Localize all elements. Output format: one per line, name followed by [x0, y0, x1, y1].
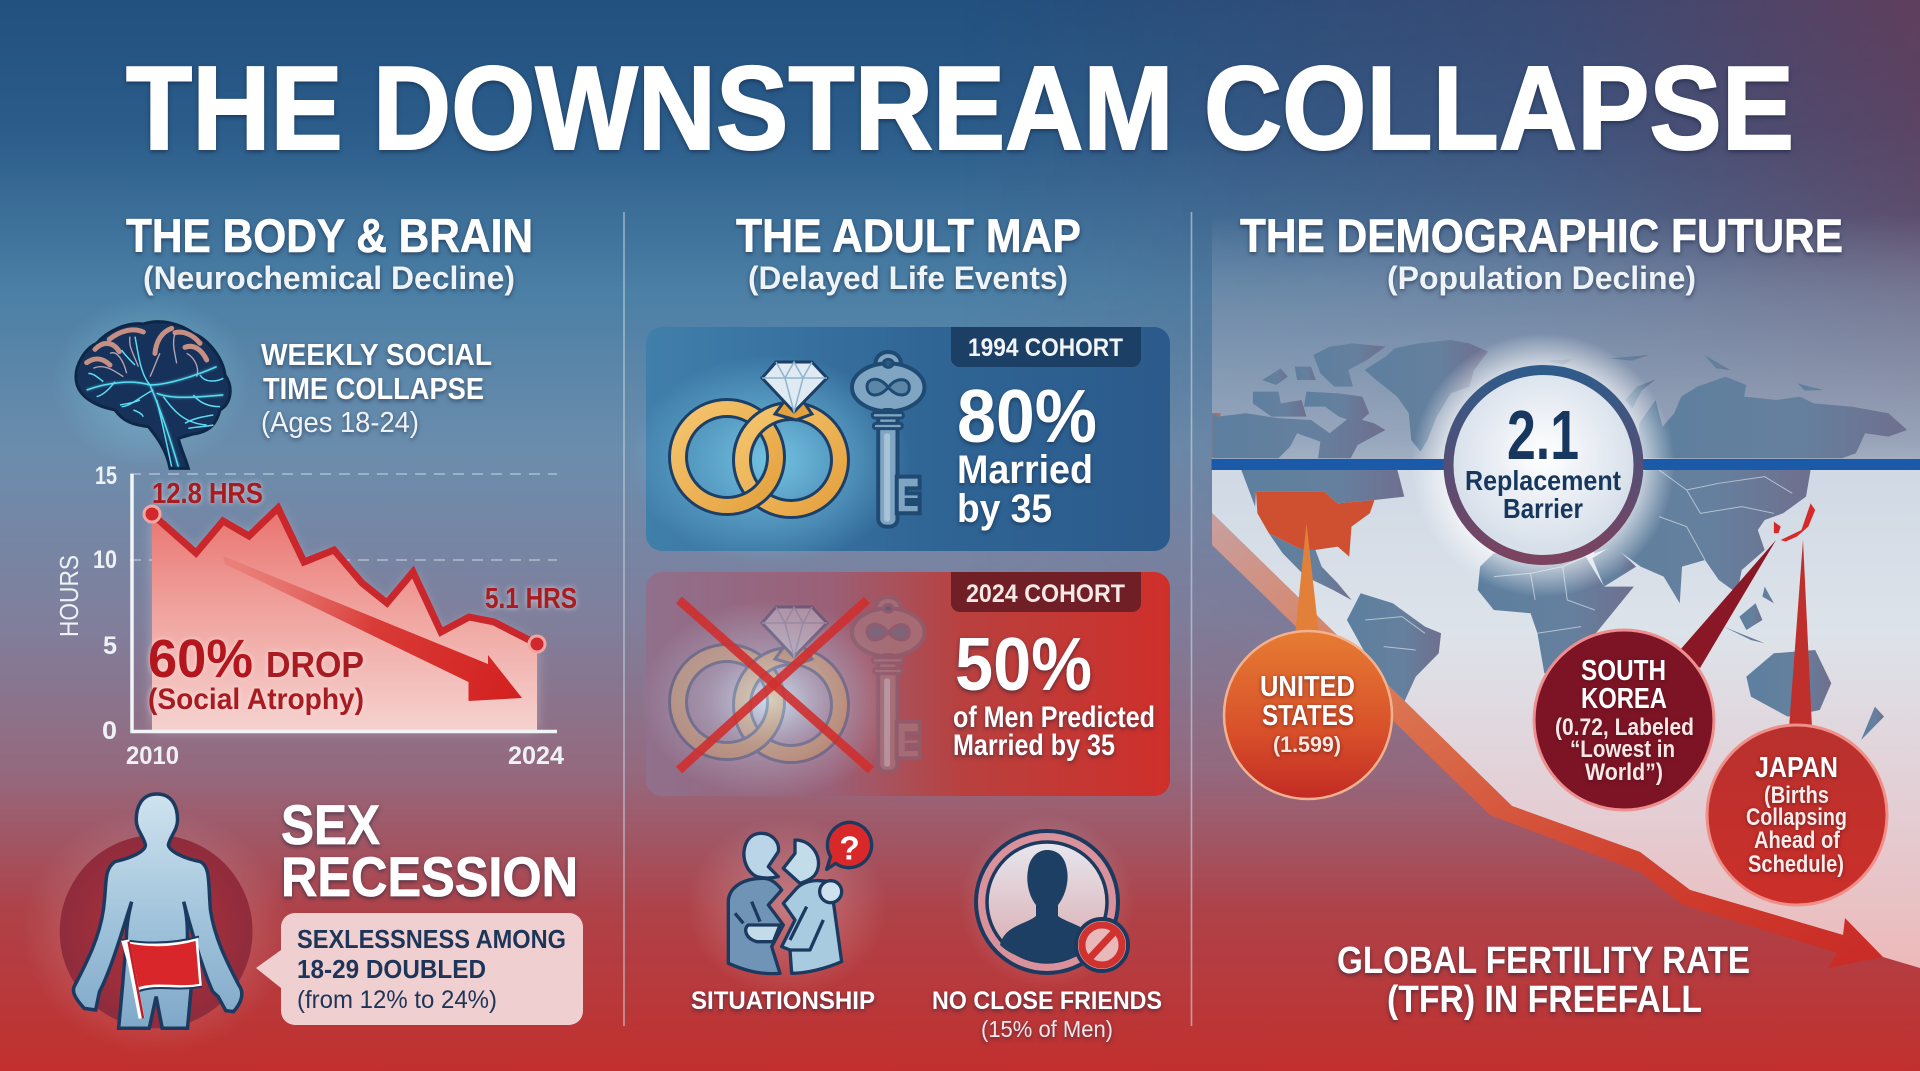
panel: 2024 cohort	[640, 572, 1170, 800]
text: global fertility rate in freefall	[1337, 940, 1750, 1021]
cohort tag 1994: 1994 COHORT	[968, 334, 1123, 362]
stat: 80 percent married by 35: Married	[957, 448, 1093, 492]
stat: 80 percent married by 35: 80%	[957, 374, 1097, 458]
icon: question speech bubble	[827, 822, 872, 869]
icon: glowing brain	[52, 295, 252, 468]
heading: the adult map: (Delayed Life Events)	[748, 260, 1068, 296]
bubble: south korea: KOREA	[1581, 683, 1667, 715]
land below the barrier line	[1241, 470, 1884, 740]
stat: 50 percent of men predicted: 50%	[955, 622, 1092, 706]
prohibition sign	[1076, 919, 1128, 971]
country border lines	[1365, 470, 1792, 650]
label: no close friends	[932, 987, 1162, 1042]
text: weekly social time collapse: TIME COLLAPSE	[263, 371, 484, 406]
line chart: weekly social hours 2010 to 2024	[54, 462, 577, 770]
icon: situationship couple	[687, 817, 887, 997]
heading: the demographic future: (Population Decline)	[1387, 260, 1696, 296]
chart axis labels	[54, 462, 564, 770]
land above the barrier line	[1212, 340, 1907, 458]
stat: 80 percent married by 35: by 35	[957, 487, 1052, 531]
heading: the demographic future	[1240, 209, 1843, 296]
stat: 80 percent married by 35	[957, 374, 1097, 531]
icon: faded cracked key	[852, 597, 924, 772]
bubble: japan: JAPAN	[1755, 752, 1838, 784]
panel: the adult map	[630, 209, 1170, 1042]
icon: red cross	[679, 600, 871, 770]
heading: the body and brain: (Neurochemical Decline)	[143, 260, 515, 296]
chart axis labels: 10	[93, 546, 117, 574]
chart value callouts: 60%	[148, 629, 253, 689]
stat: 50 percent of men predicted	[953, 622, 1155, 762]
heading: the body and brain	[126, 209, 533, 296]
label: no close friends: NO CLOSE FRIENDS	[932, 987, 1162, 1015]
callout: sexlessness doubled: (from 12% to 24%)	[297, 986, 497, 1014]
callout: sexlessness doubled: 18-29 DOUBLED	[297, 954, 486, 984]
bubble: japan: (Births	[1764, 782, 1829, 809]
chart axis labels: 2010	[126, 742, 179, 770]
text: sex recession	[281, 793, 578, 908]
falling fertility trend arrow	[1212, 513, 1883, 968]
badge: 2.1 replacement barrier	[1448, 370, 1638, 560]
text: weekly social time collapse	[261, 337, 492, 439]
badge: 2.1 replacement barrier: Barrier	[1503, 493, 1583, 524]
bubble: south korea: SOUTH	[1581, 655, 1666, 687]
icon: faded broken rings	[678, 607, 840, 754]
badge: 2.1 replacement barrier: Replacement	[1465, 465, 1621, 496]
chart axis labels: 0	[102, 717, 117, 745]
bubble: united states: STATES	[1262, 700, 1354, 732]
badge: 2.1 replacement barrier: 2.1	[1507, 396, 1579, 474]
text: sex recession: RECESSION	[281, 845, 578, 908]
title: THE DOWNSTREAM COLLAPSE	[126, 42, 1794, 175]
bubble: united states: UNITED	[1260, 671, 1355, 703]
downward trend arrow	[223, 556, 522, 701]
chart value callouts: DROP	[266, 644, 364, 685]
callout: sexlessness doubled	[256, 913, 583, 1025]
panel: the demographic future	[1212, 209, 1920, 1021]
cohort tag 2024	[951, 572, 1141, 612]
bubble: japan: Schedule)	[1748, 851, 1844, 878]
label: situationship: SITUATIONSHIP	[691, 987, 875, 1015]
highlighted USA	[1256, 492, 1374, 557]
bubble: south korea	[1534, 540, 1776, 810]
bubble: united states	[1224, 523, 1392, 799]
heading: the body and brain: THE BODY & BRAIN	[126, 209, 533, 262]
icon: key	[852, 352, 924, 527]
cohort tag 2024: 2024 COHORT	[966, 580, 1125, 608]
world map	[1212, 333, 1907, 740]
chart axis labels: 5	[103, 632, 117, 660]
icon: body figure with red flag	[22, 794, 290, 1055]
highlighted Japan and Korea	[1774, 503, 1815, 542]
cohort tag 1994	[951, 327, 1141, 367]
chart value callouts	[148, 478, 577, 716]
callout: sexlessness doubled: SEXLESSNESS AMONG	[297, 924, 566, 954]
text: global fertility rate in freefall: GLOBAL FERTILITY RATE	[1337, 940, 1750, 982]
bubble: south korea: (0.72, Labeled	[1555, 714, 1694, 741]
bubble: south korea: “Lowest in	[1570, 736, 1675, 763]
bubble: japan	[1707, 540, 1887, 905]
text: global fertility rate in freefall: (TFR) IN FREEFALL	[1387, 979, 1702, 1021]
stat: 50 percent of men predicted: of Men Predicted	[953, 701, 1155, 734]
bubble: japan: Collapsing	[1746, 804, 1847, 831]
text: sex recession: SEX	[281, 793, 380, 856]
stat: 50 percent of men predicted: Married by 35	[953, 729, 1115, 762]
heading: the adult map	[736, 209, 1081, 296]
chart axis labels: 2024	[508, 742, 564, 770]
bubble: japan: Ahead of	[1754, 827, 1841, 854]
panel: the body and brain	[22, 209, 583, 1055]
heading: the adult map: THE ADULT MAP	[736, 209, 1081, 262]
label: no close friends: (15% of Men)	[981, 1016, 1113, 1042]
bubble: south korea: World”)	[1585, 759, 1663, 786]
chart axis labels: HOURS	[54, 555, 84, 637]
chart value callouts: (Social Atrophy)	[148, 683, 364, 716]
icon: gold wedding rings	[678, 362, 840, 509]
icon: no close friends silhouette	[959, 814, 1135, 990]
chart value callouts: 5.1 HRS	[485, 583, 577, 615]
bubble: united states: (1.599)	[1273, 732, 1341, 757]
text: weekly social time collapse: WEEKLY SOCIAL	[261, 337, 492, 372]
text: weekly social time collapse: (Ages 18-24)	[261, 407, 419, 439]
heading: the demographic future: THE DEMOGRAPHIC FUTURE	[1240, 209, 1843, 262]
icon: question speech bubble: ?	[839, 830, 860, 867]
replacement barrier line	[1212, 459, 1920, 470]
map background	[1212, 215, 1920, 975]
column dividers	[624, 212, 1192, 1026]
panel: 1994 cohort	[630, 327, 1170, 565]
chart value callouts: 12.8 HRS	[152, 478, 263, 510]
chart axis labels: 15	[95, 462, 117, 490]
